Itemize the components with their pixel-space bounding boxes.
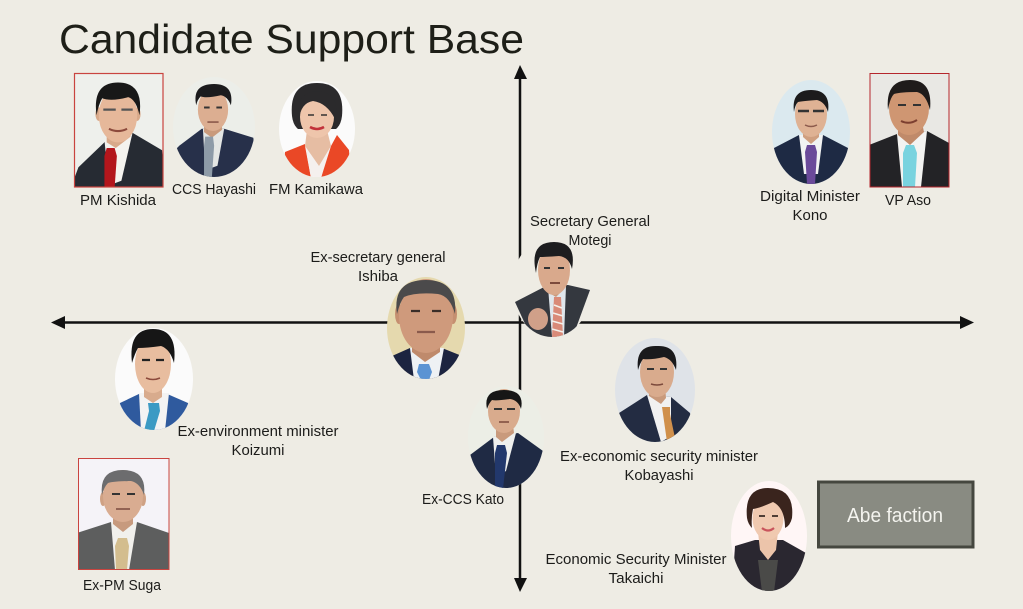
- label: Ex-environment minister Koizumi: Ex-environment minister: [178, 424, 339, 440]
- candidate: Ex-economic security minister Kobayashi: [560, 338, 758, 484]
- photo: Kono: [769, 80, 853, 184]
- candidate: FM Kamikawa: [269, 81, 364, 198]
- photo: Aso: [869, 73, 949, 187]
- label: FM Kamikawa: FM Kamikawa: [269, 182, 364, 198]
- label: Secretary General Motegi: Secretary General: [530, 214, 650, 230]
- candidate: Ex-environment minister Koizumi: [113, 328, 339, 459]
- label: Digital Minister Kono: [760, 189, 860, 224]
- label: Ex-secretary general Ishiba: Ex-secretary general: [310, 250, 446, 266]
- label: Ex-environment minister Koizumi: Koizumi: [232, 443, 284, 459]
- label: Ex-PM Suga: Ex-PM Suga: [83, 578, 162, 594]
- label: Secretary General Motegi: [530, 214, 650, 249]
- label: Economic Security Minister Takaichi: Economic Security Minister: [546, 552, 727, 568]
- label: Ex-economic security minister Kobayashi: Kobayashi: [624, 468, 694, 484]
- candidate: Economic Security Minister Takaichi: [546, 481, 808, 592]
- label: PM Kishida: PM Kishida: [80, 193, 157, 209]
- photo: Kamikawa: [279, 81, 355, 178]
- photo: Kishida: [73, 73, 165, 188]
- photo: Takaichi: [731, 481, 808, 592]
- candidate: Digital Minister Kono: [760, 80, 860, 224]
- candidate: Ex-secretary general Ishiba: [310, 250, 465, 380]
- legend box: Abe faction: Abe faction: [847, 505, 943, 527]
- photo: Hayashi: [176, 84, 254, 177]
- label: Economic Security Minister Takaichi: Takaichi: [608, 571, 664, 587]
- horizontal axis arrow: [51, 316, 974, 329]
- photo: Ishiba: [387, 277, 465, 380]
- candidate: Ex-CCS Kato: [422, 386, 546, 508]
- candidate: Secretary General Motegi: [512, 214, 650, 339]
- label: Secretary General Motegi: Motegi: [568, 233, 612, 249]
- label: CCS Hayashi: CCS Hayashi: [172, 182, 256, 198]
- label: Ex-CCS Kato: Ex-CCS Kato: [422, 492, 504, 508]
- label: Ex-economic security minister Kobayashi: Ex-economic security minister: [560, 449, 758, 465]
- photo: Kobayashi: [615, 338, 695, 444]
- candidate: CCS Hayashi: [172, 84, 256, 197]
- label: Ex-secretary general Ishiba: [310, 250, 446, 285]
- label: Ex-environment minister Koizumi: [178, 424, 339, 459]
- candidate: VP Aso: [869, 73, 949, 209]
- label: Economic Security Minister Takaichi: [546, 552, 727, 587]
- label: VP Aso: VP Aso: [885, 193, 931, 209]
- vertical axis arrow: [514, 65, 527, 592]
- label: Ex-secretary general Ishiba: Ishiba: [358, 269, 399, 285]
- candidate: PM Kishida: [73, 73, 165, 209]
- photo: Kato: [470, 389, 543, 488]
- candidate: Ex-PM Suga: [77, 458, 169, 594]
- legend box: Abe faction: [818, 482, 973, 547]
- label: Digital Minister Kono: Kono: [792, 208, 828, 224]
- photo: Koizumi: [113, 328, 195, 431]
- photo: Suga: [77, 458, 169, 570]
- label: Digital Minister Kono: Digital Minister: [760, 189, 860, 205]
- label: Ex-economic security minister Kobayashi: [560, 449, 758, 484]
- photo: Motegi: [515, 242, 590, 337]
- title: Candidate Support Base: [59, 16, 524, 62]
